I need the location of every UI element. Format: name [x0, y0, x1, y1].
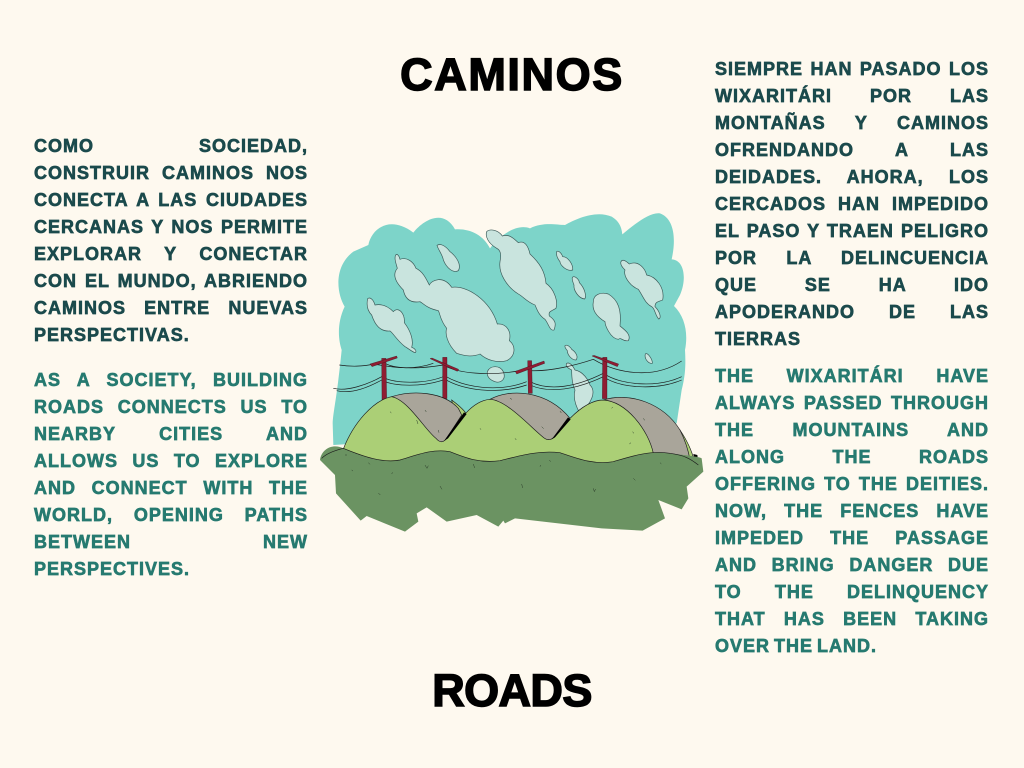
text block: right English paragraph: IMPEDED THE PASSAGE [715, 528, 989, 548]
text block: right English paragraph: AND BRING DANGER DUE [715, 555, 989, 575]
text block: left English paragraph: ALLOWS US TO EXPLORE [34, 451, 308, 471]
text block: right Spanish paragraph: SIEMPRE HAN PASADO LOS [715, 59, 989, 79]
text block: right English paragraph [714, 365, 989, 656]
title: Caminos: CAMINOS [400, 49, 624, 100]
text block: right Spanish paragraph: WIXARITÁRI POR LAS [715, 86, 989, 106]
text block: left English paragraph: NEARBY CITIES AND [34, 424, 308, 444]
text block: right English paragraph: ALWAYS PASSED THROUGH [715, 393, 989, 413]
text block: right Spanish paragraph: POR LA DELINCUENCIA [715, 248, 989, 268]
far green slivers [452, 400, 694, 460]
text block: right English paragraph: OVER THE LAND. [715, 636, 877, 656]
title: Roads: ROADS [432, 665, 592, 716]
text block: right English paragraph: THE MOUNTAINS AND [715, 420, 989, 440]
text block: left English paragraph: WORLD, OPENING PATHS [34, 505, 308, 525]
text block: left English paragraph: AS A SOCIETY, BUILDING [34, 370, 308, 390]
text block: left Spanish paragraph [34, 136, 308, 345]
text block: right English paragraph: THE WIXARITÁRI HAVE [715, 366, 989, 386]
text block: right Spanish paragraph: DEIDADES. AHORA, LOS [715, 167, 989, 187]
text block: right Spanish paragraph: MONTAÑAS Y CAMINOS [715, 113, 989, 133]
clouds [367, 230, 663, 363]
text block: left Spanish paragraph: CONECTA A LAS CIUDADES [34, 190, 308, 210]
text block: right Spanish paragraph: QUE SE HA IDO [715, 275, 989, 295]
text block: left English paragraph: BETWEEN NEW [34, 532, 308, 552]
text block: left English paragraph: AND CONNECT WITH THE [34, 478, 308, 498]
grass tufts [346, 398, 661, 495]
text block: left Spanish paragraph: PERSPECTIVAS. [34, 325, 190, 345]
text block: right English paragraph: THAT HAS BEEN TAKING [715, 609, 989, 629]
text block: right Spanish paragraph: OFRENDANDO A LAS [715, 140, 989, 160]
hill shadows [444, 412, 699, 465]
text block: right Spanish paragraph: APODERANDO DE LAS [715, 302, 989, 322]
text block: right English paragraph: TO THE DELINQUENCY [715, 582, 989, 602]
text block: left English paragraph: ROADS CONNECTS US TO [34, 397, 308, 417]
ground [320, 446, 703, 532]
text block: left English paragraph [34, 370, 308, 579]
power lines [333, 359, 682, 392]
lower clouds [487, 363, 593, 413]
utility poles [370, 355, 619, 400]
text block: right Spanish paragraph: EL PASO Y TRAEN PELIGRO [715, 221, 989, 241]
text block: left Spanish paragraph: CAMINOS ENTRE NUEVAS [34, 298, 308, 318]
text block: left Spanish paragraph: CERCANAS Y NOS PERMITE [34, 217, 308, 237]
text block: right Spanish paragraph: CERCADOS HAN IMPEDIDO [715, 194, 989, 214]
text block: left English paragraph: PERSPECTIVES. [34, 559, 190, 579]
text block: right Spanish paragraph: TIERRAS [715, 329, 801, 349]
text block: left Spanish paragraph: COMO SOCIEDAD, [34, 136, 308, 156]
text block: right English paragraph: OFFERING TO THE DEITIES. [715, 474, 989, 494]
text block: left Spanish paragraph: CON EL MUNDO, ABRIENDO [34, 271, 308, 291]
text block: right Spanish paragraph [714, 59, 989, 349]
text block: right English paragraph: NOW, THE FENCES HAVE [715, 501, 989, 521]
text block: right English paragraph: ALONG THE ROADS [715, 447, 989, 467]
grey hills [392, 393, 690, 460]
ground outline [322, 448, 698, 465]
text block: left Spanish paragraph: CONSTRUIR CAMINOS NOS [34, 163, 308, 183]
sky background [333, 213, 686, 445]
green hills [343, 397, 653, 467]
text block: left Spanish paragraph: EXPLORAR Y CONECTAR [34, 244, 308, 264]
